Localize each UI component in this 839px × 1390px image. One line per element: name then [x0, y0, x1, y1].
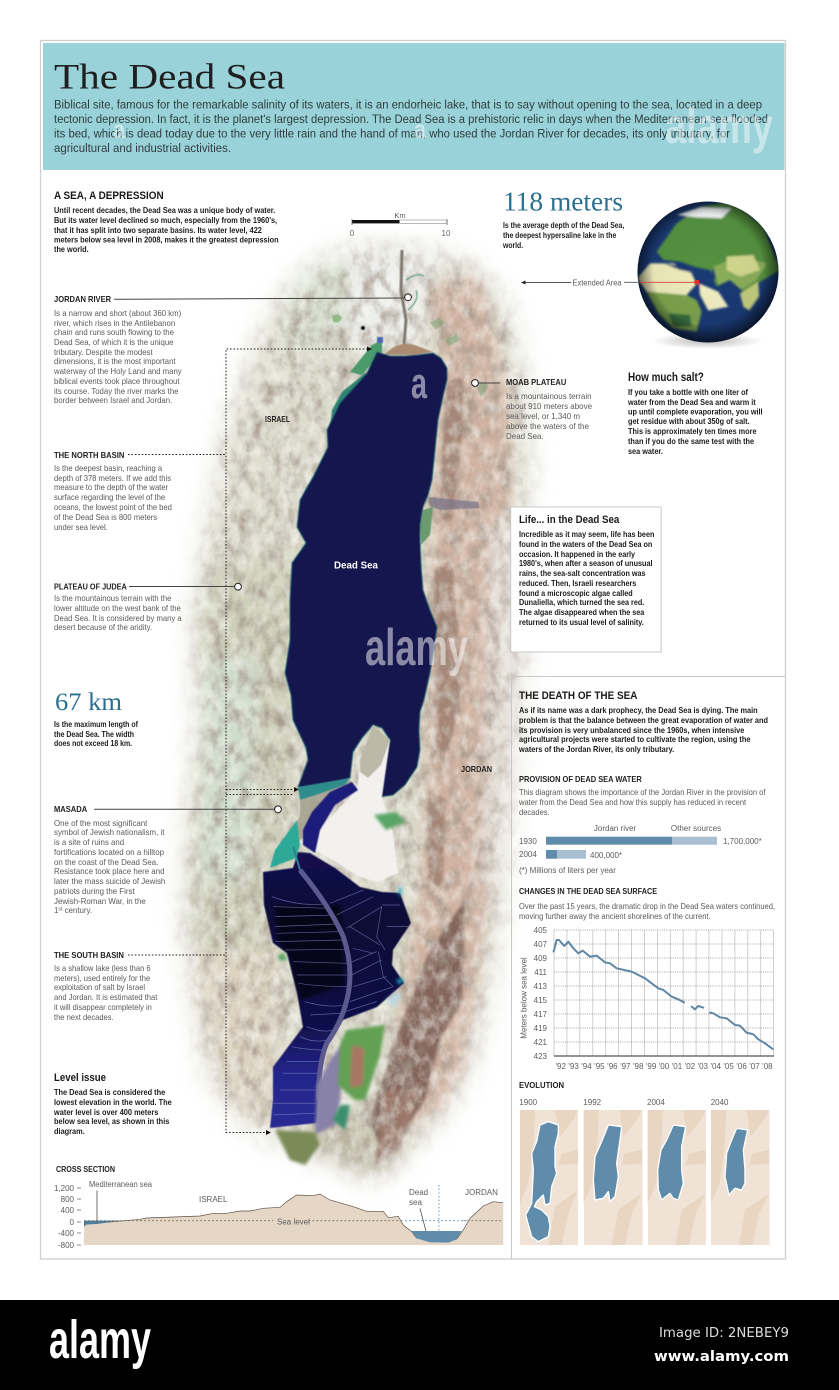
panel: the death of the sea: THE DEATH OF THE SEA	[519, 689, 638, 702]
bracket arrowheads	[266, 346, 372, 1135]
callout: Plateau of Judea: Is the mountainous terrain with the	[54, 594, 172, 603]
evolution land relief	[520, 1110, 769, 1245]
callout: Plateau of Judea: desert because of the aridity.	[54, 623, 152, 632]
callout: Jordan River: tributary. Despite the modest	[54, 348, 153, 357]
callout: Masada: on the coast of the Dead Sea.	[54, 858, 158, 867]
callout: South Basin: it will disappear completely in	[54, 1003, 152, 1012]
callout: Jordan River: dimensions, it is the most important	[54, 357, 176, 366]
scale bar: 0	[350, 229, 355, 238]
callout: North Basin: under sea level.	[54, 523, 108, 532]
callout: South Basin	[54, 951, 158, 1022]
cross section diagram: -400	[58, 1229, 75, 1238]
provision bar chart: Other sources	[671, 824, 721, 833]
line chart: Dead Sea surface: 405	[534, 926, 548, 935]
header watermark: a	[414, 114, 426, 144]
callout: Masada: One of the most significant	[54, 819, 148, 828]
panel: the death of the sea: agricultural projects were started to cultivate the region, using the	[519, 735, 751, 744]
callout: Jordan River: chain and runs south flowing to the	[54, 328, 174, 337]
cross section diagram: CROSS SECTION	[56, 1164, 115, 1174]
stat: 67 km: 67 km	[55, 689, 123, 716]
stat: 67 km: does not exceed 18 km.	[54, 738, 132, 748]
callout: North Basin: of the Dead Sea is 800 meters	[54, 513, 157, 522]
line chart: Dead Sea surface: '99	[646, 1062, 657, 1071]
panel: the death of the sea	[512, 676, 785, 1259]
panel: the death of the sea: problem is that the balance between the great evaporation of water and	[519, 716, 768, 725]
river and wetlands	[297, 250, 488, 545]
block: a sea, a depression: But its water level declined so much, especially from the 1960's,	[54, 216, 277, 225]
callout: Moab Plateau: MOAB PLATEAU	[506, 378, 567, 387]
line chart: Dead Sea surface: '94	[581, 1062, 592, 1071]
callout: Plateau of Judea: Dead Sea. It is considered by many a	[54, 614, 182, 623]
intro text	[54, 98, 768, 155]
callout: Masada: patriots during the First	[54, 887, 135, 896]
southern farmland	[275, 812, 406, 1165]
panel: the death of the sea: its provision is very unbalanced since the 1960s, when intensive	[519, 726, 745, 735]
evolution maps: 1992	[583, 1098, 602, 1107]
block: a sea, a depression	[54, 191, 279, 254]
panel: the death of the sea: waters of the Jordan River, its only tributary.	[518, 745, 674, 754]
callout: Plateau of Judea	[54, 582, 241, 632]
line chart: Dead Sea surface: '01	[672, 1062, 683, 1071]
provision bar chart: (*) Millions of liters per year	[519, 866, 616, 875]
line chart: Dead Sea surface: moving further away the ancient shorelines of the current.	[519, 912, 711, 921]
block: a sea, a depression: the world.	[54, 245, 89, 254]
panel: life in the Dead Sea: 1980's, when after a season of unusual	[519, 559, 652, 568]
block: how much salt: up until complete evaporation, you will	[628, 407, 763, 417]
callout: South Basin: meters), used entirely for the	[54, 974, 151, 983]
callout: North Basin: surface regarding the level of the	[54, 493, 166, 502]
callout: Masada: Resistance took place here and	[54, 867, 164, 876]
block: a sea, a depression: A SEA, A DEPRESSION	[54, 191, 164, 202]
cross section diagram: 0	[70, 1218, 75, 1227]
extended area pointer: Extended Area	[572, 278, 622, 288]
footer image id: Image ID: 2NEBEY9	[659, 1326, 789, 1341]
stat: 118 meters: Is the average depth of the Dead Sea,	[503, 220, 624, 230]
line chart: Dead Sea surface: 415	[534, 996, 548, 1005]
line chart: Dead Sea surface: '07	[749, 1062, 760, 1071]
stat: 67 km	[54, 689, 138, 748]
callout: Jordan River: border between Israel and Jordan.	[54, 396, 172, 405]
provision bar chart: This diagram shows the importance of the Jordan River in the provision of	[519, 788, 766, 797]
intro text: agricultural and industrial activities.	[54, 141, 231, 155]
callout: Jordan River: its course. Today the river marks the	[54, 387, 179, 396]
cross section diagram: Mediterranean sea	[89, 1180, 153, 1189]
line chart: Dead Sea surface: 413	[534, 982, 548, 991]
callout: North Basin: depth of 378 meters. If we add this	[54, 474, 171, 483]
header watermark: a	[113, 114, 125, 144]
header band	[43, 43, 784, 170]
line chart: Dead Sea surface: 421	[534, 1038, 548, 1047]
block: how much salt: than if you do the same test with the	[628, 437, 755, 446]
extended area pointer	[521, 278, 695, 288]
callout: South Basin: THE SOUTH BASIN	[54, 951, 124, 960]
provision bar chart: 400,000*	[590, 851, 622, 860]
cross section diagram	[54, 1164, 503, 1250]
block: how much salt	[627, 371, 763, 456]
block: level issue: The Dead Sea is considered the	[54, 1088, 166, 1097]
line chart: Dead Sea surface: '06	[736, 1062, 747, 1071]
dashed callout bracket	[128, 349, 371, 1132]
panel: life in the Dead Sea: found in the waters of the Dead Sea on	[519, 540, 653, 549]
line chart: Dead Sea surface	[519, 887, 775, 1071]
callout: Masada: Jewish-Roman War, in the	[54, 897, 146, 906]
block: how much salt: water from the Dead Sea and warm it	[627, 398, 756, 407]
footer bar	[0, 1300, 839, 1390]
evolution maps: 1900	[519, 1098, 538, 1107]
line chart: Dead Sea surface: 423	[534, 1052, 548, 1061]
north basin	[285, 352, 447, 797]
line chart: Dead Sea surface: '97	[620, 1062, 631, 1071]
cross section diagram: JORDAN	[465, 1188, 498, 1197]
line chart: Dead Sea surface: 419	[534, 1024, 548, 1033]
callout: Moab Plateau: sea level, or 1,340 m	[506, 412, 580, 421]
line chart: Dead Sea surface: '08	[762, 1062, 773, 1071]
callout: South Basin: Is a shallow lake (less than 6	[54, 964, 151, 973]
watermark: alamy on north basin: alamy	[365, 619, 468, 677]
panel: life in the Dead Sea: occasion. It happened in the early	[519, 550, 636, 559]
satellite map	[170, 233, 544, 1191]
evolution maps	[519, 1081, 770, 1245]
block: how much salt: get residue with about 350g of salt.	[628, 417, 750, 426]
block: how much salt: If you take a bottle with one liter of	[628, 388, 748, 397]
panel: life in the Dead Sea: Dunaliella, which turned the sea red.	[519, 598, 644, 607]
line chart: Dead Sea surface: CHANGES IN THE DEAD SEA SURFACE	[519, 887, 657, 896]
causeway	[300, 870, 350, 1100]
callout: Masada: later the mass suicide of Jewish	[54, 877, 165, 886]
stat: 67 km: the Dead Sea. The width	[54, 729, 134, 739]
callout: North Basin: measure to the depth of the water	[54, 483, 168, 492]
line chart: Dead Sea surface: '02	[685, 1062, 696, 1071]
line chart: Dead Sea surface: '03	[698, 1062, 709, 1071]
evolution maps: 2004	[647, 1098, 665, 1107]
block: level issue: Level issue	[54, 1071, 106, 1084]
scale bar: 10	[442, 229, 451, 238]
panel: life in the Dead Sea: The algae disappeared when the sea	[519, 608, 645, 617]
cross section diagram: 400	[61, 1206, 75, 1215]
evolution maps: 2040	[711, 1098, 729, 1107]
callout: Masada: century.	[62, 906, 92, 915]
line chart: Dead Sea surface: 407	[534, 940, 548, 949]
cross section diagram: 800	[61, 1195, 75, 1204]
callout: Masada: 1	[54, 906, 58, 915]
callout: Masada: MASADA	[54, 805, 87, 814]
provision bar chart: PROVISION OF DEAD SEA WATER	[519, 775, 642, 784]
panel: life in the Dead Sea: Incredible as it may seem, life has been	[519, 530, 655, 539]
callout: South Basin: and Jordan. It is estimated that	[54, 993, 158, 1002]
label: Dead Sea: Dead Sea	[334, 560, 378, 572]
panel: life in the Dead Sea	[511, 507, 661, 652]
line chart: Dead Sea surface: 411	[534, 968, 548, 977]
cross section diagram: Dead	[409, 1188, 428, 1197]
block: level issue: lowest elevation in the world. The	[54, 1098, 172, 1107]
line chart: Dead Sea surface: '92	[555, 1062, 566, 1071]
page frame	[40, 40, 786, 1259]
header watermark: alamy	[665, 98, 773, 154]
line chart: Dead Sea surface: '93	[568, 1062, 579, 1071]
block: a sea, a depression: Until recent decades, the Dead Sea was a unique body of water.	[54, 206, 275, 215]
title: The Dead Sea	[54, 56, 285, 96]
callout: South Basin: the next decades.	[54, 1013, 114, 1022]
callout: Plateau of Judea: PLATEAU OF JUDEA	[54, 582, 127, 592]
block: how much salt: This is approximately ten times more	[628, 427, 757, 436]
provision bar chart: water from the Dead Sea and how this supply has reduced in recent	[518, 798, 747, 807]
footer url: www.alamy.com	[654, 1349, 789, 1365]
provision bar chart	[518, 775, 766, 875]
stat: 118 meters	[502, 186, 624, 250]
line chart: Dead Sea surface: 409	[534, 954, 548, 963]
line chart: Dead Sea surface: Over the past 15 years, the dramatic drop in the Dead Sea waters continued,	[519, 902, 775, 911]
cross section diagram: -800	[58, 1241, 75, 1250]
south basin evaporation ponds	[263, 847, 411, 1135]
intro text: Biblical site, famous for the remarkable salinity of its waters, it is an endorheic lake, that is to say without opening to the sea, located in a deep	[54, 98, 762, 112]
evolution sea shapes	[526, 1122, 748, 1242]
header watermark	[113, 98, 773, 154]
block: how much salt: sea water.	[628, 447, 663, 456]
callout: Jordan River: Is a narrow and short (about 360 km)	[54, 309, 181, 318]
panel: life in the Dead Sea: reduced. Then, Israeli researchers	[519, 579, 637, 588]
block: level issue: diagram.	[54, 1127, 85, 1136]
callout: Moab Plateau	[472, 378, 592, 441]
block: level issue: water level is over 400 meters	[53, 1108, 159, 1117]
block: level issue: below sea level, as shown in this	[54, 1117, 170, 1126]
callout: North Basin: THE NORTH BASIN	[54, 451, 125, 460]
line chart: Dead Sea surface: '04	[710, 1062, 721, 1071]
callout: Jordan River: waterway of the Holy Land and many	[53, 367, 183, 376]
label: Jordan: JORDAN	[461, 764, 492, 774]
provision bar chart: 2004	[519, 850, 537, 859]
callout: Masada: fortifications located on a hilltop	[54, 848, 164, 857]
stat: 118 meters: the deepest hypersaline lake in the	[503, 230, 616, 240]
callout: Moab Plateau: Dead Sea.	[506, 432, 544, 441]
cross section diagram: Sea level	[277, 1218, 310, 1226]
callout: Jordan River: Dead Sea, of which it is the unique	[54, 338, 174, 347]
Lisan peninsula salt flats	[270, 725, 398, 882]
panel: life in the Dead Sea: rains, the sea-salt concentration was	[519, 569, 646, 578]
block: how much salt: How much salt?	[628, 371, 704, 384]
intro text: tectonic depression. In fact, it is the planet's largest depression. The Dead Sea is a prehistoric relic in days when the Mediterranean sea flooded	[54, 112, 768, 126]
stat: 67 km: Is the maximum length of	[54, 719, 138, 729]
callout: North Basin	[54, 451, 172, 532]
callout: Masada: is a site of ruins and	[54, 838, 124, 847]
provision bar chart: 1930	[519, 837, 537, 846]
cross section diagram: sea	[409, 1198, 422, 1207]
channel	[303, 782, 358, 853]
callout: Masada: symbol of Jewish nationalism, it	[54, 828, 165, 837]
scale bar: Km	[394, 211, 406, 220]
label: Israel: ISRAEL	[265, 414, 290, 424]
panel: life in the Dead Sea: returned to its usual level of salinity.	[519, 618, 644, 627]
line chart: Dead Sea surface: '05	[723, 1062, 734, 1071]
panel: life in the Dead Sea: Life... in the Dead Sea	[519, 513, 619, 526]
callout: North Basin: oceans, the lowest point of the bed	[54, 503, 172, 512]
cross section diagram: ISRAEL	[199, 1195, 228, 1204]
provision bar chart: Jordan river	[594, 824, 636, 833]
line chart: Dead Sea surface: '95	[594, 1062, 605, 1071]
callout: Jordan River: river, which rises in the Antilebanon	[54, 319, 175, 328]
callout: North Basin: Is the deepest basin, reaching a	[54, 464, 163, 473]
callout: Moab Plateau: about 910 meters above	[506, 402, 592, 411]
callout: South Basin: exploitation of salt by Israel	[54, 983, 145, 992]
evolution maps: EVOLUTION	[519, 1081, 564, 1090]
callout: Jordan River: biblical events took place throughout	[54, 377, 180, 386]
stat: 118 meters: world.	[502, 240, 523, 250]
scale bar	[350, 211, 451, 238]
line chart: Dead Sea surface: '98	[633, 1062, 644, 1071]
callout: Jordan River: JORDAN RIVER	[54, 295, 111, 304]
callout: Moab Plateau: Is a mountainous terrain	[506, 392, 592, 401]
callout: Moab Plateau: above the waters of the	[506, 422, 589, 431]
callout: Jordan River	[53, 294, 411, 405]
provision bar chart: 1,700,000*	[723, 837, 762, 846]
block: level issue	[53, 1071, 172, 1136]
line chart: Dead Sea surface: 417	[534, 1010, 548, 1019]
callout: Plateau of Judea: lower altitude on the west bank of the	[54, 604, 181, 613]
watermark: a on north basin: a	[411, 359, 427, 408]
stat: 118 meters: 118 meters	[503, 186, 623, 216]
cross section diagram: 1,200	[54, 1184, 75, 1193]
evolution panels land	[520, 1110, 770, 1245]
globe locator	[637, 202, 780, 349]
panel: the death of the sea: As if its name was a dark prophecy, the Dead Sea is dying. The main	[519, 706, 758, 715]
footer logo: alamy	[49, 1310, 151, 1370]
block: a sea, a depression: meters below sea level in 2008, makes it the greatest depression	[54, 235, 279, 245]
line chart: Dead Sea surface: '00	[659, 1062, 670, 1071]
provision bar chart: decades.	[519, 808, 550, 817]
callout: Masada: st	[58, 906, 63, 913]
intro text: its bed, which is dead today due to the very little rain and the hand of man, who used the Jordan River for decades, its only tributary, for	[54, 126, 730, 140]
block: a sea, a depression: that it has split into two separate basins. Its water level, 422	[54, 226, 262, 235]
line chart: Dead Sea surface: '96	[607, 1062, 618, 1071]
callout: Masada	[54, 805, 281, 915]
panel: life in the Dead Sea: found a microscopic algae called	[519, 589, 633, 598]
line chart: Dead Sea surface: Meters below sea level	[520, 957, 528, 1039]
